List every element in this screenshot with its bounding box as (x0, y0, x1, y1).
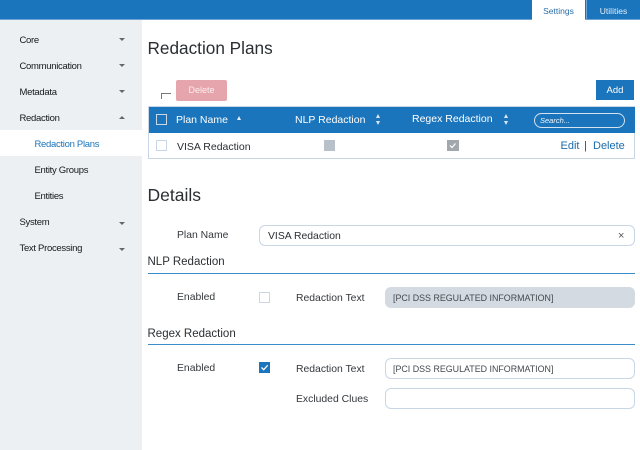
row checkbox (156, 140, 167, 151)
input: NLP Redaction Text disabled: [PCI DSS REGULATED INFORMATION] (393, 293, 553, 303)
icon: sort ascending (237, 116, 241, 120)
top header bar (0, 0, 640, 20)
nav: Redaction Plans selected (0, 130, 142, 156)
heading: Regex Redaction: Regex Redaction (148, 328, 236, 340)
column: Plan Name: Plan Name (176, 114, 228, 126)
button: Delete (176, 80, 227, 101)
input: NLP Redaction Text disabled (385, 287, 635, 308)
nav: Entity Groups: Entity Groups (34, 165, 88, 176)
icon: Text Processing arrow (119, 248, 125, 251)
icon: Communication arrow (119, 64, 125, 67)
label: Excluded Clues: Excluded Clues (296, 394, 368, 405)
label: Regex Redaction Text: Redaction Text (296, 364, 365, 375)
tab: Settings (532, 0, 585, 20)
separator: | (584, 140, 587, 152)
nav: System: System (20, 217, 49, 228)
label: Regex Enabled: Enabled (177, 363, 215, 374)
input: Plan Name: VISA Redaction (268, 231, 341, 242)
tab: Settings: Settings (543, 6, 574, 16)
checkbox: Regex Enabled (259, 362, 270, 373)
column: NLP Redaction: NLP Redaction (295, 114, 365, 126)
checkbox: select all (156, 114, 167, 125)
icon: Metadata arrow (119, 90, 125, 93)
icon: sort NLP (376, 114, 381, 125)
button: Add (596, 80, 634, 100)
input: Plan Name (259, 225, 635, 246)
icon: System arrow (119, 222, 125, 225)
icon: clear: × (618, 230, 624, 242)
label: NLP Enabled: Enabled (177, 292, 215, 303)
label: Plan Name: Plan Name (177, 230, 228, 241)
nav: Redaction: Redaction (20, 113, 60, 124)
nav: Entities: Entities (34, 191, 63, 202)
icon: Redaction arrow (119, 116, 125, 119)
tab: Utilities: Utilities (600, 6, 627, 16)
nav: Text Processing: Text Processing (20, 243, 82, 254)
label: NLP Redaction Text: Redaction Text (296, 293, 365, 304)
cell: NLP disabled checkbox (324, 140, 335, 151)
input: Regex Redaction Text (385, 358, 635, 379)
action: Delete: Delete (593, 140, 625, 152)
nav: Redaction Plans selected: Redaction Plans (34, 139, 99, 150)
table: redaction plans (148, 106, 635, 159)
heading: NLP Redaction: NLP Redaction (148, 256, 225, 268)
input: Excluded Clues (385, 388, 635, 409)
button: Delete: Delete (188, 85, 214, 95)
tab: Utilities (586, 0, 640, 19)
icon: Core arrow (119, 38, 125, 41)
icon: sort Regex (504, 114, 509, 125)
search box (534, 113, 625, 128)
table header row (149, 107, 635, 133)
checkbox: NLP Enabled (259, 292, 270, 303)
cell: Regex checked checkbox (447, 140, 459, 151)
nav: Communication: Communication (20, 61, 82, 72)
search box: Search... (540, 116, 570, 125)
icon: bulk action corner (161, 93, 171, 99)
nav: Metadata: Metadata (20, 87, 57, 98)
button: Add: Add (607, 85, 623, 96)
column: Regex Redaction: Regex Redaction (412, 112, 493, 124)
nav: Core: Core (20, 35, 39, 46)
input: Regex Redaction Text: [PCI DSS REGULATED INFORMATION] (393, 364, 553, 374)
title: Redaction Plans: Redaction Plans (148, 38, 273, 58)
action: Edit: Edit (560, 140, 579, 152)
panel: sidebar navigation (0, 20, 142, 450)
cell: VISA Redaction: VISA Redaction (177, 141, 251, 153)
heading: Details: Details (148, 185, 201, 205)
